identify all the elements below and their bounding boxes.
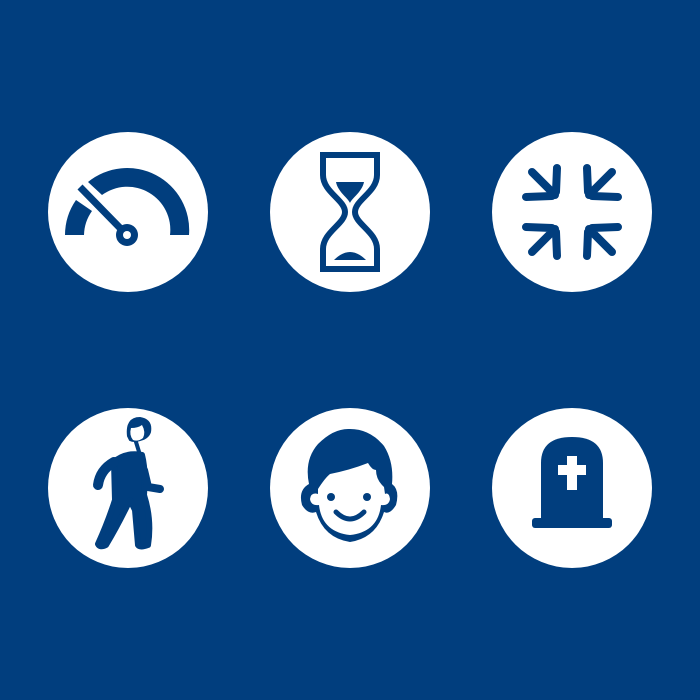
icon: walking person — [48, 408, 208, 568]
icon: compress arrows — [492, 132, 652, 292]
icon: tombstone — [492, 408, 652, 568]
icon: speedometer — [48, 132, 208, 292]
icon: smiling face — [270, 408, 430, 568]
icon: hourglass — [270, 132, 430, 292]
